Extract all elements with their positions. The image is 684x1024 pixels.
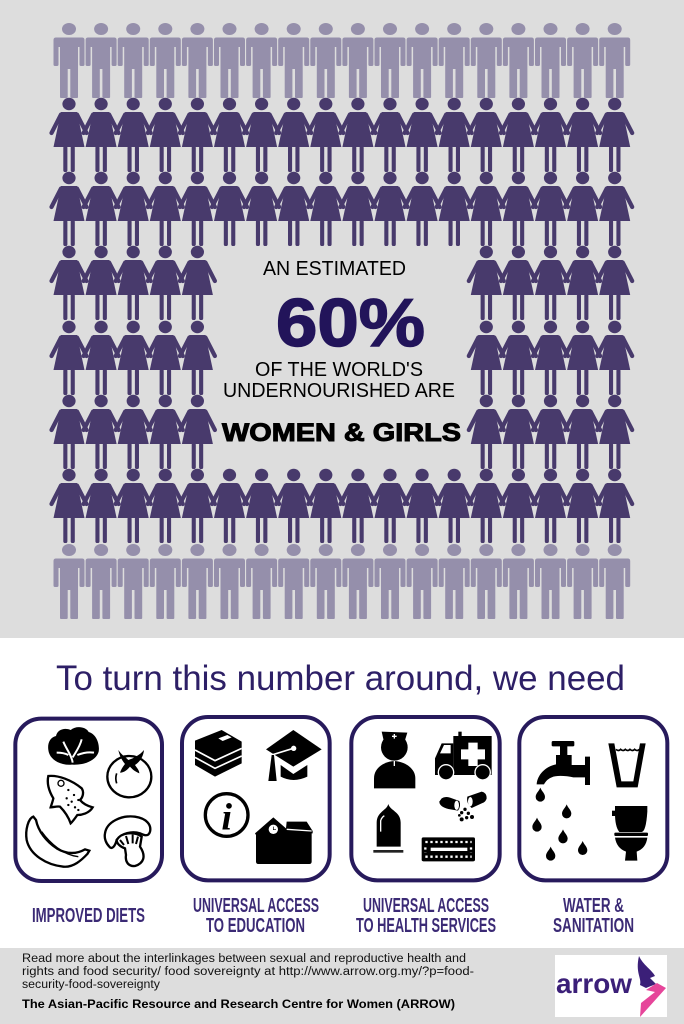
label: water and sanitation: SANITATION [553,915,634,937]
pictogram: women row 5 around the text [52,395,632,469]
pictogram: women row 2 [52,172,632,246]
number: 60 percent: 60% [276,285,425,361]
panel: improved diets [15,719,162,881]
icon: ambulance [435,732,492,780]
text: organisation name: The Asian-Pacific Resource and Research Centre for Women (ARROW) [22,997,455,1011]
label: universal access to health services [356,895,496,937]
pictogram: women row 4 around the text [52,321,632,395]
icon: books [195,730,242,777]
panel: water and sanitation [519,717,667,880]
icon: lettuce [48,727,99,765]
panel: universal access to health services [351,717,500,880]
icon: information: i [221,796,232,838]
label: water and sanitation [553,895,634,937]
icon: fish [48,776,93,823]
text: read more: Read more about the interlinkages between sexual and reproductive health and [22,953,466,965]
icon: graduation cap [266,730,322,781]
label: universal access to education [193,895,319,937]
label: universal access to education: UNIVERSAL ACCESS [193,895,319,917]
icon: contraceptive pill pack [422,837,475,861]
heading: to turn this number around: To turn this number around, we need [56,659,625,698]
pictogram: women row 3 around the text [52,246,632,320]
pictogram: women row 1 [52,98,632,172]
icon: pills [439,792,487,821]
text: undernourished are: UNDERNOURISHED ARE [223,380,455,402]
label: universal access to health services: UNIVERSAL ACCESS [363,895,489,917]
text: read more [22,953,474,991]
pictogram: bottom row of men [54,544,630,619]
label: improved diets: IMPROVED DIETS [32,905,145,927]
icon: mushroom [105,816,150,866]
panel: footer [0,948,684,1024]
icon: information [205,794,248,838]
panel: universal access to education [182,717,330,880]
icon: glass of water [608,743,646,787]
logo: arrow: arrow [556,968,632,999]
panel: grey statistic background [0,0,684,638]
icon: water drops [532,788,587,861]
text: read more: rights and food security/ food sovereignty at http://www.arrow.org.my/?p=food- [22,966,474,978]
icon: tomato [107,750,151,797]
icon: toilet [612,806,648,861]
text: of the world's: OF THE WORLD'S [255,359,423,381]
text: read more: security-food-sovereignty [22,979,160,991]
pictogram: top row of men [54,23,630,98]
label: universal access to education: TO EDUCATION [206,915,305,937]
icon: tap [537,741,590,785]
label: water and sanitation: WATER & [563,895,624,917]
headline statistic [222,258,461,447]
icon: school building [255,817,313,864]
icon: condom [373,804,403,853]
icon: banana [26,817,89,867]
icon: nurse [374,732,415,788]
logo: arrow [555,955,667,1017]
text: an estimated: AN ESTIMATED [263,258,406,280]
text: women and girls: WOMEN & GIRLS [222,419,461,447]
pictogram: women row 6 [52,469,632,543]
label: universal access to health services: TO HEALTH SERVICES [356,915,496,937]
